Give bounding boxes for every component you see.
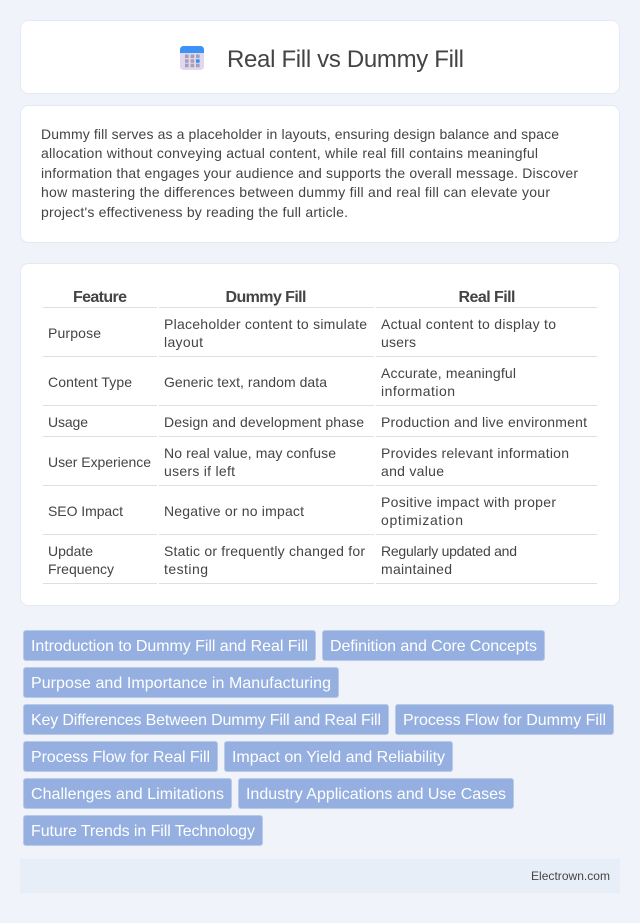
text block: introduction: allocation without conveying actual content, while real fill contains meaningful <box>41 145 538 161</box>
footer credit: Electrown.com <box>531 869 610 883</box>
tag: Purpose and Importance in Manufacturing <box>31 675 331 692</box>
row: content type <box>48 365 516 399</box>
tag: Industry Applications and Use Cases <box>246 786 506 803</box>
table header <box>73 289 516 306</box>
row: purpose: Purpose <box>48 325 101 341</box>
row: update frequency: Regularly updated and <box>381 543 517 559</box>
tag: Process Flow for Real Fill <box>31 749 210 766</box>
row: update frequency: testing <box>164 561 208 577</box>
tag <box>24 668 338 698</box>
tag <box>238 778 514 808</box>
row: purpose: Placeholder content to simulate <box>164 316 367 332</box>
table header: Dummy Fill <box>226 289 306 306</box>
tag <box>224 742 452 772</box>
tag <box>24 816 262 846</box>
row: content type: Accurate, meaningful <box>381 365 516 381</box>
tag: Key Differences Between Dummy Fill and Real Fill <box>31 712 381 729</box>
row: update frequency: maintained <box>381 561 452 577</box>
text block: introduction: how mastering the differences between dummy fill and real fill can elevate your <box>41 184 550 200</box>
row: usage: Design and development phase <box>164 414 364 430</box>
footer <box>20 859 620 893</box>
tag list <box>24 630 614 846</box>
tag: Future Trends in Fill Technology <box>31 823 255 840</box>
table header: Real Fill <box>458 289 516 306</box>
row: user experience <box>48 445 569 479</box>
row: update frequency <box>48 543 517 577</box>
text block: introduction <box>41 126 578 220</box>
tag: Impact on Yield and Reliability <box>232 749 445 766</box>
row: update frequency: Update <box>48 543 93 559</box>
row: content type: information <box>381 383 455 399</box>
row: seo impact: SEO Impact <box>48 503 123 519</box>
panel: introduction <box>20 106 620 242</box>
row: purpose: Actual content to display to <box>381 316 556 332</box>
row: update frequency: Frequency <box>48 561 114 577</box>
text block: introduction: information that engages your audience and supports the overall message. Discover <box>41 165 578 181</box>
tag <box>396 704 614 734</box>
title: Real Fill vs Dummy Fill <box>227 46 464 73</box>
icon: calendar <box>180 46 204 70</box>
text block: introduction: Dummy fill serves as a placeholder in layouts, ensuring design balance and space <box>41 126 559 142</box>
row: purpose: layout <box>164 334 203 350</box>
row: content type: Content Type <box>48 374 132 390</box>
tag <box>24 742 218 772</box>
tag: Process Flow for Dummy Fill <box>403 712 606 729</box>
row: user experience: and value <box>381 463 444 479</box>
row: update frequency: Static or frequently changed for <box>164 543 365 559</box>
row: seo impact: Negative or no impact <box>164 503 304 519</box>
row: seo impact <box>48 494 556 528</box>
tag <box>24 704 388 734</box>
row: user experience: users if left <box>164 463 235 479</box>
row: content type: Generic text, random data <box>164 374 327 390</box>
row: seo impact: optimization <box>381 512 463 528</box>
row: usage: Usage <box>48 414 88 430</box>
row: purpose: users <box>381 334 416 350</box>
row: purpose <box>48 316 556 350</box>
row: usage: Production and live environment <box>381 414 587 430</box>
panel: comparison table <box>20 264 620 606</box>
table header: Feature <box>73 289 127 306</box>
tag: Introduction to Dummy Fill and Real Fill <box>31 638 308 655</box>
tag <box>322 630 544 660</box>
row: user experience: Provides relevant information <box>381 445 569 461</box>
tag: Challenges and Limitations <box>31 786 224 803</box>
panel: header <box>20 20 620 94</box>
row: usage <box>48 414 587 430</box>
tag <box>24 630 316 660</box>
row: seo impact: Positive impact with proper <box>381 494 556 510</box>
tag: Definition and Core Concepts <box>330 638 537 655</box>
row: user experience: User Experience <box>48 454 151 470</box>
row: user experience: No real value, may confuse <box>164 445 336 461</box>
tag <box>24 778 232 808</box>
text block: introduction: project's effectiveness by reading the full article. <box>41 204 348 220</box>
